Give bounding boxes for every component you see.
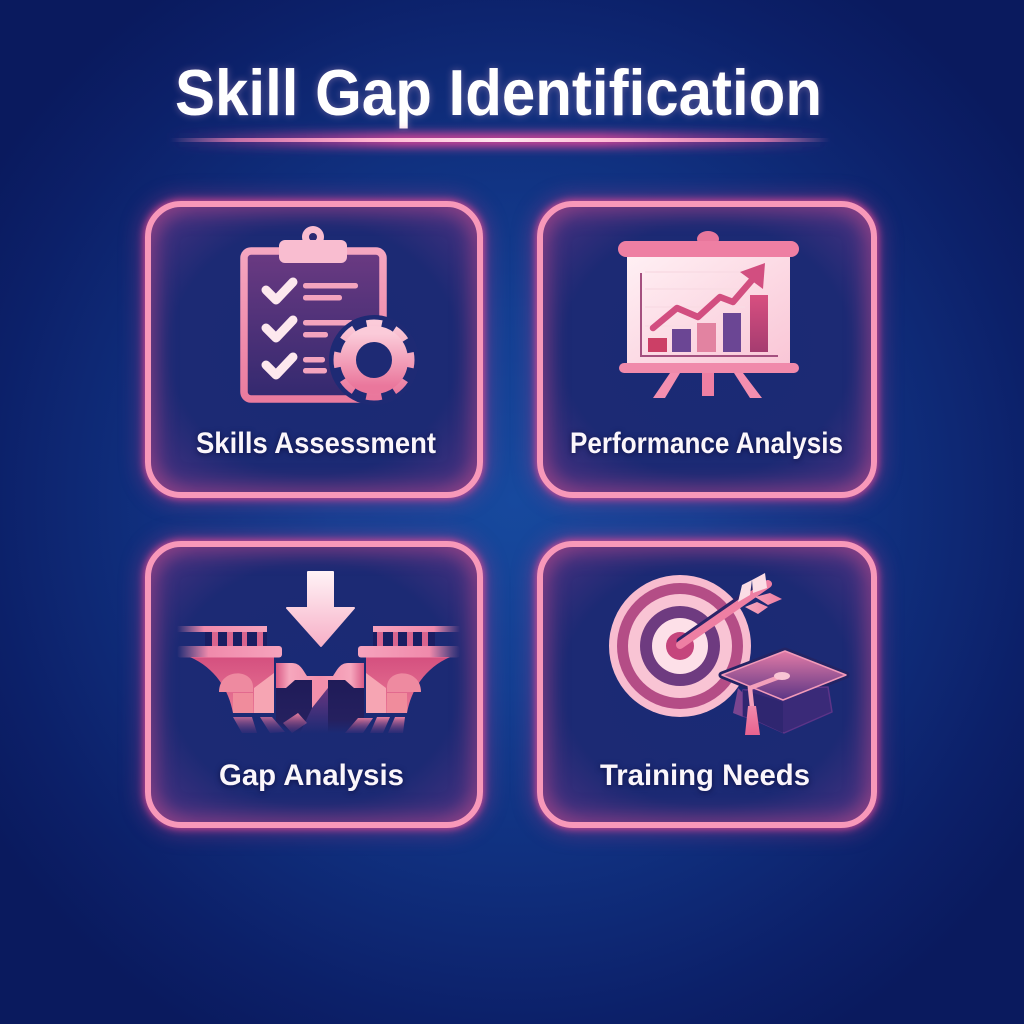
panel: training needs (537, 541, 877, 828)
icon: presentation board with chart (618, 231, 799, 398)
icon: target with arrow and graduation cap (609, 573, 846, 735)
right bridge section (358, 626, 460, 713)
panel: performance analysis (537, 201, 877, 498)
label: performance analysis: Performance Analysis (570, 427, 843, 460)
label: skills assessment: Skills Assessment (196, 427, 436, 460)
icon: clipboard with gear (244, 226, 419, 405)
title underline glow (172, 125, 828, 155)
label: gap analysis: Gap Analysis (219, 759, 404, 792)
title: Skill Gap Identification (175, 56, 822, 129)
left bridge section (177, 626, 282, 713)
panel: skills assessment (145, 201, 483, 498)
label: training needs: Training Needs (600, 759, 810, 792)
panel: gap analysis (145, 541, 483, 828)
icon: down arrow and broken bridge (177, 572, 460, 733)
